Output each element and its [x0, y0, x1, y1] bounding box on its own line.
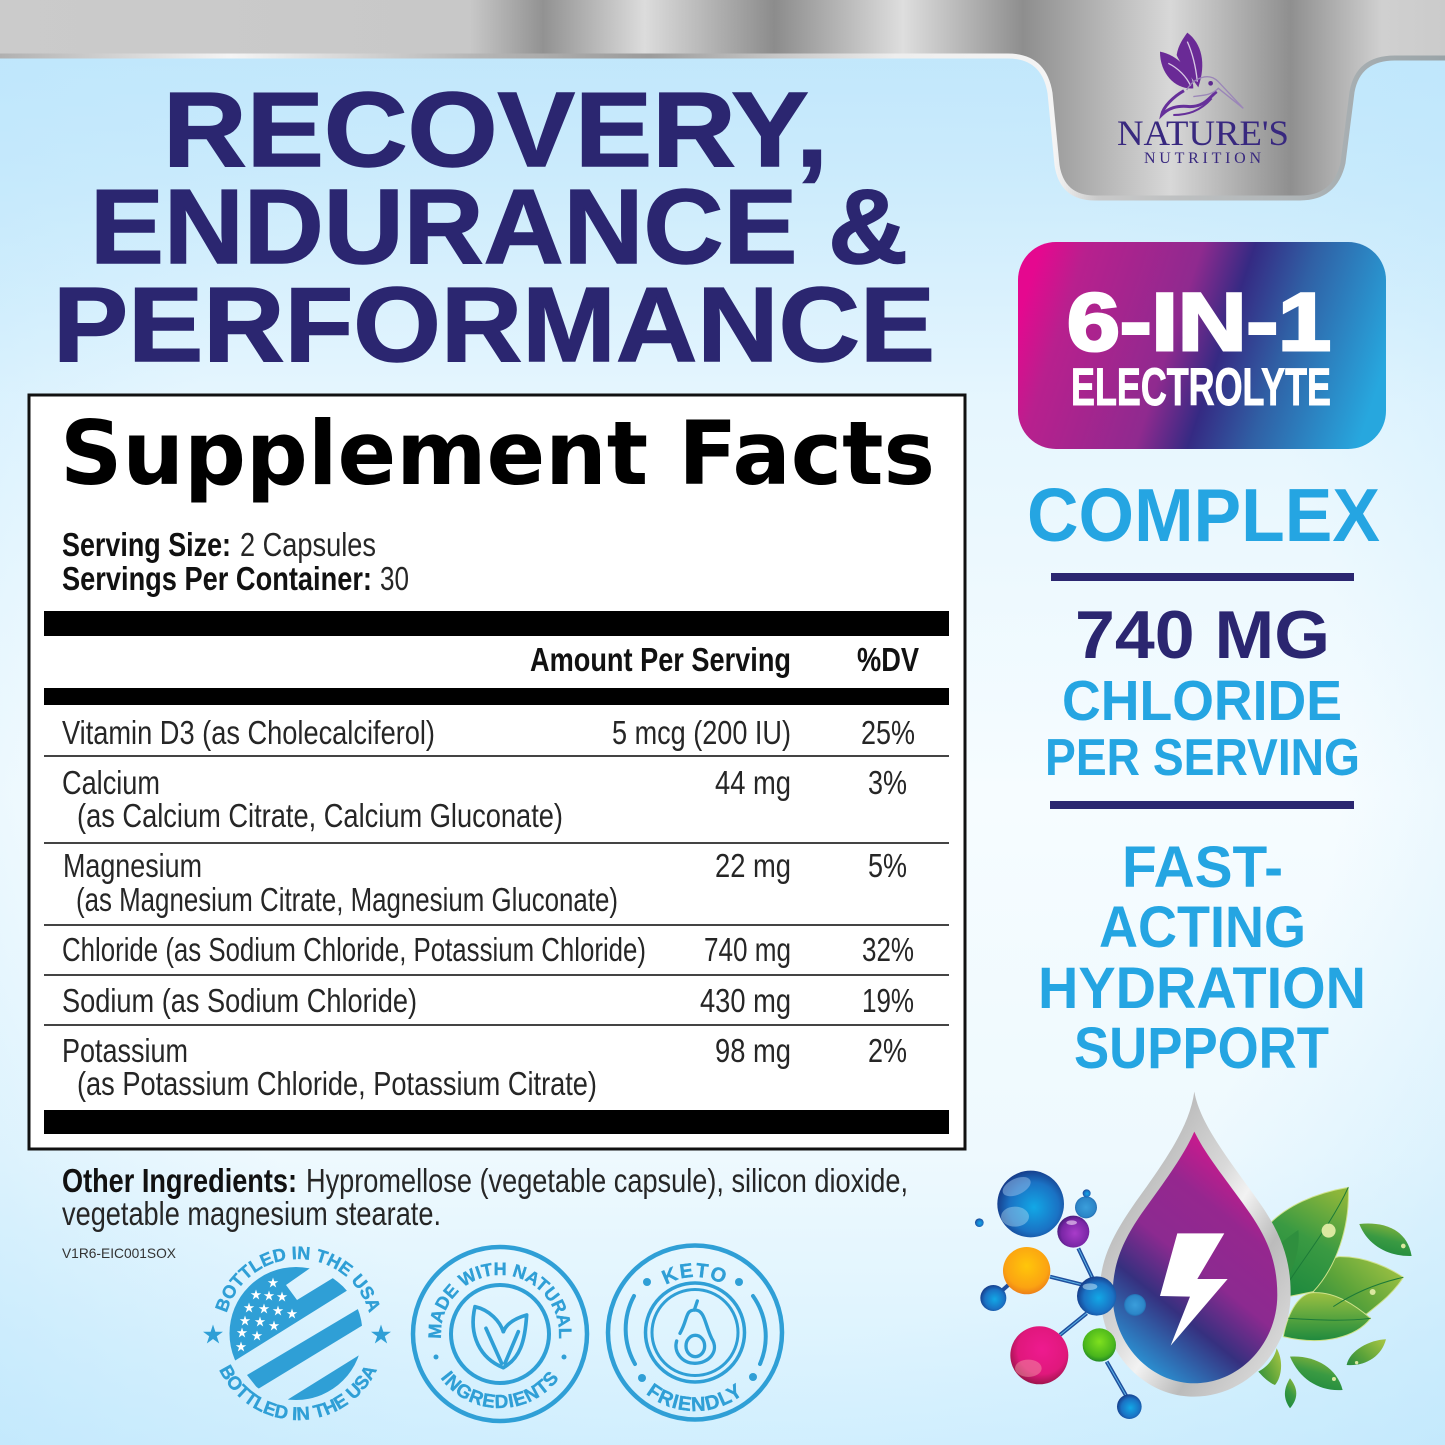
row: Sodium: Sodium (as Sodium Chloride) — [62, 982, 417, 1019]
serving information: Servings Per Container: — [62, 560, 372, 597]
logo: Nature's Nutrition — [1117, 33, 1289, 167]
dose: 740 mg chloride per serving: CHLORIDE — [1062, 669, 1342, 733]
serving information — [62, 526, 409, 597]
row: Vitamin D3 — [62, 714, 915, 751]
row: Vitamin D3: 25% — [861, 714, 915, 751]
dose: 740 mg chloride per serving — [1045, 597, 1360, 787]
row: Vitamin D3: 5 mcg (200 IU) — [612, 714, 791, 751]
serving information: Serving Size: — [62, 526, 231, 563]
row: Potassium: 98 mg — [715, 1032, 791, 1069]
row: Chloride: 740 mg — [704, 931, 791, 968]
row: Chloride: Chloride (as Sodium Chloride, Potassium Chloride) — [62, 931, 646, 968]
column headers: %DV — [857, 641, 919, 678]
icon: leaf sprout — [473, 1307, 527, 1368]
title — [53, 71, 935, 384]
badge: Bottled in the USA — [203, 1246, 391, 1420]
complex label: COMPLEX — [1027, 473, 1380, 557]
brand name: NATURE'S — [1117, 113, 1289, 153]
other ingredients text: Other Ingredients: — [62, 1162, 297, 1199]
serving information: 2 Capsules — [240, 526, 376, 563]
row: Calcium: Calcium — [62, 764, 160, 801]
row: Potassium: 2% — [868, 1032, 907, 1069]
fast-acting hydration support: FAST- — [1122, 835, 1283, 900]
bottom arc text: INGREDIENTS — [440, 1370, 558, 1408]
row: Potassium: Potassium — [62, 1032, 188, 1069]
row: Calcium: (as Calcium Citrate, Calcium Gluconate) — [77, 797, 563, 834]
side stars — [203, 1325, 391, 1343]
6-in-1 label: 6-IN-1 — [1067, 277, 1331, 368]
bottom arc text: BOTTLED IN THE USA — [219, 1364, 378, 1420]
row: Sodium: 430 mg — [700, 982, 791, 1019]
other ingredients text: vegetable magnesium stearate. — [62, 1195, 441, 1232]
icon: molecule — [975, 1171, 1146, 1419]
title: ENDURANCE & — [90, 168, 908, 286]
icon: hummingbird with leaf wings — [1160, 33, 1243, 115]
icon: leaves — [1258, 1187, 1412, 1408]
badge: Made with natural ingredients — [410, 1244, 590, 1424]
brand subline: NUTRITION — [1144, 150, 1261, 167]
row: Sodium: 19% — [862, 982, 914, 1019]
row: Magnesium: Magnesium — [63, 847, 202, 884]
badge: Keto friendly — [606, 1243, 784, 1422]
column headers: Amount Per Serving — [530, 641, 791, 678]
row: Magnesium: 5% — [868, 847, 907, 884]
icon: avocado — [676, 1301, 714, 1363]
fast-acting hydration support: HYDRATION — [1038, 956, 1366, 1021]
fast-acting hydration support: ACTING — [1099, 895, 1306, 960]
row: Chloride: 32% — [862, 931, 914, 968]
panel: 6-in-1 electrolyte — [1018, 242, 1386, 449]
row: Magnesium: 22 mg — [715, 847, 791, 884]
row: Calcium: 3% — [868, 764, 907, 801]
top arc text: KETO — [661, 1262, 726, 1284]
other ingredients text — [62, 1162, 908, 1232]
row: Magnesium: (as Magnesium Citrate, Magnesium Gluconate) — [76, 881, 618, 918]
illustration: hydration drop, molecule and leaves — [975, 1092, 1412, 1419]
fast-acting hydration support — [1038, 835, 1366, 1081]
serving information: 30 — [380, 560, 409, 597]
title: RECOVERY, — [163, 71, 828, 189]
row: Magnesium — [63, 847, 907, 918]
fast-acting hydration support: SUPPORT — [1074, 1016, 1329, 1081]
icon: lightning bolt — [1160, 1233, 1228, 1346]
top arc text: BOTTLED IN THE USA — [215, 1246, 380, 1313]
icon: water drop — [1100, 1092, 1291, 1397]
bottom arc text: FRIENDLY — [646, 1382, 740, 1412]
title: PERFORMANCE — [53, 266, 935, 384]
silver header band with logo tab — [0, 0, 1445, 198]
panel: supplement facts — [29, 395, 965, 1149]
other ingredients text: Hypromellose (vegetable capsule), silicon dioxide, — [306, 1162, 908, 1199]
dose: 740 mg chloride per serving: 740 MG — [1075, 597, 1330, 673]
row: Calcium — [62, 764, 907, 834]
row: Potassium: (as Potassium Chloride, Potassium Citrate) — [77, 1065, 597, 1102]
lot code: V1R6-EIC001SOX — [62, 1245, 177, 1261]
electrolyte label: ELECTROLYTE — [1071, 358, 1331, 417]
dose: 740 mg chloride per serving: PER SERVING — [1045, 729, 1360, 787]
row: Vitamin D3: Vitamin D3 (as Cholecalciferol) — [62, 714, 435, 751]
top arc text: MADE WITH NATURAL — [428, 1262, 572, 1338]
row: Calcium: 44 mg — [715, 764, 791, 801]
row: Potassium — [62, 1032, 907, 1102]
row: Sodium — [62, 982, 914, 1019]
heading: Supplement Facts: Supplement Facts — [60, 402, 935, 505]
icon: USA flag circle — [230, 1267, 362, 1400]
